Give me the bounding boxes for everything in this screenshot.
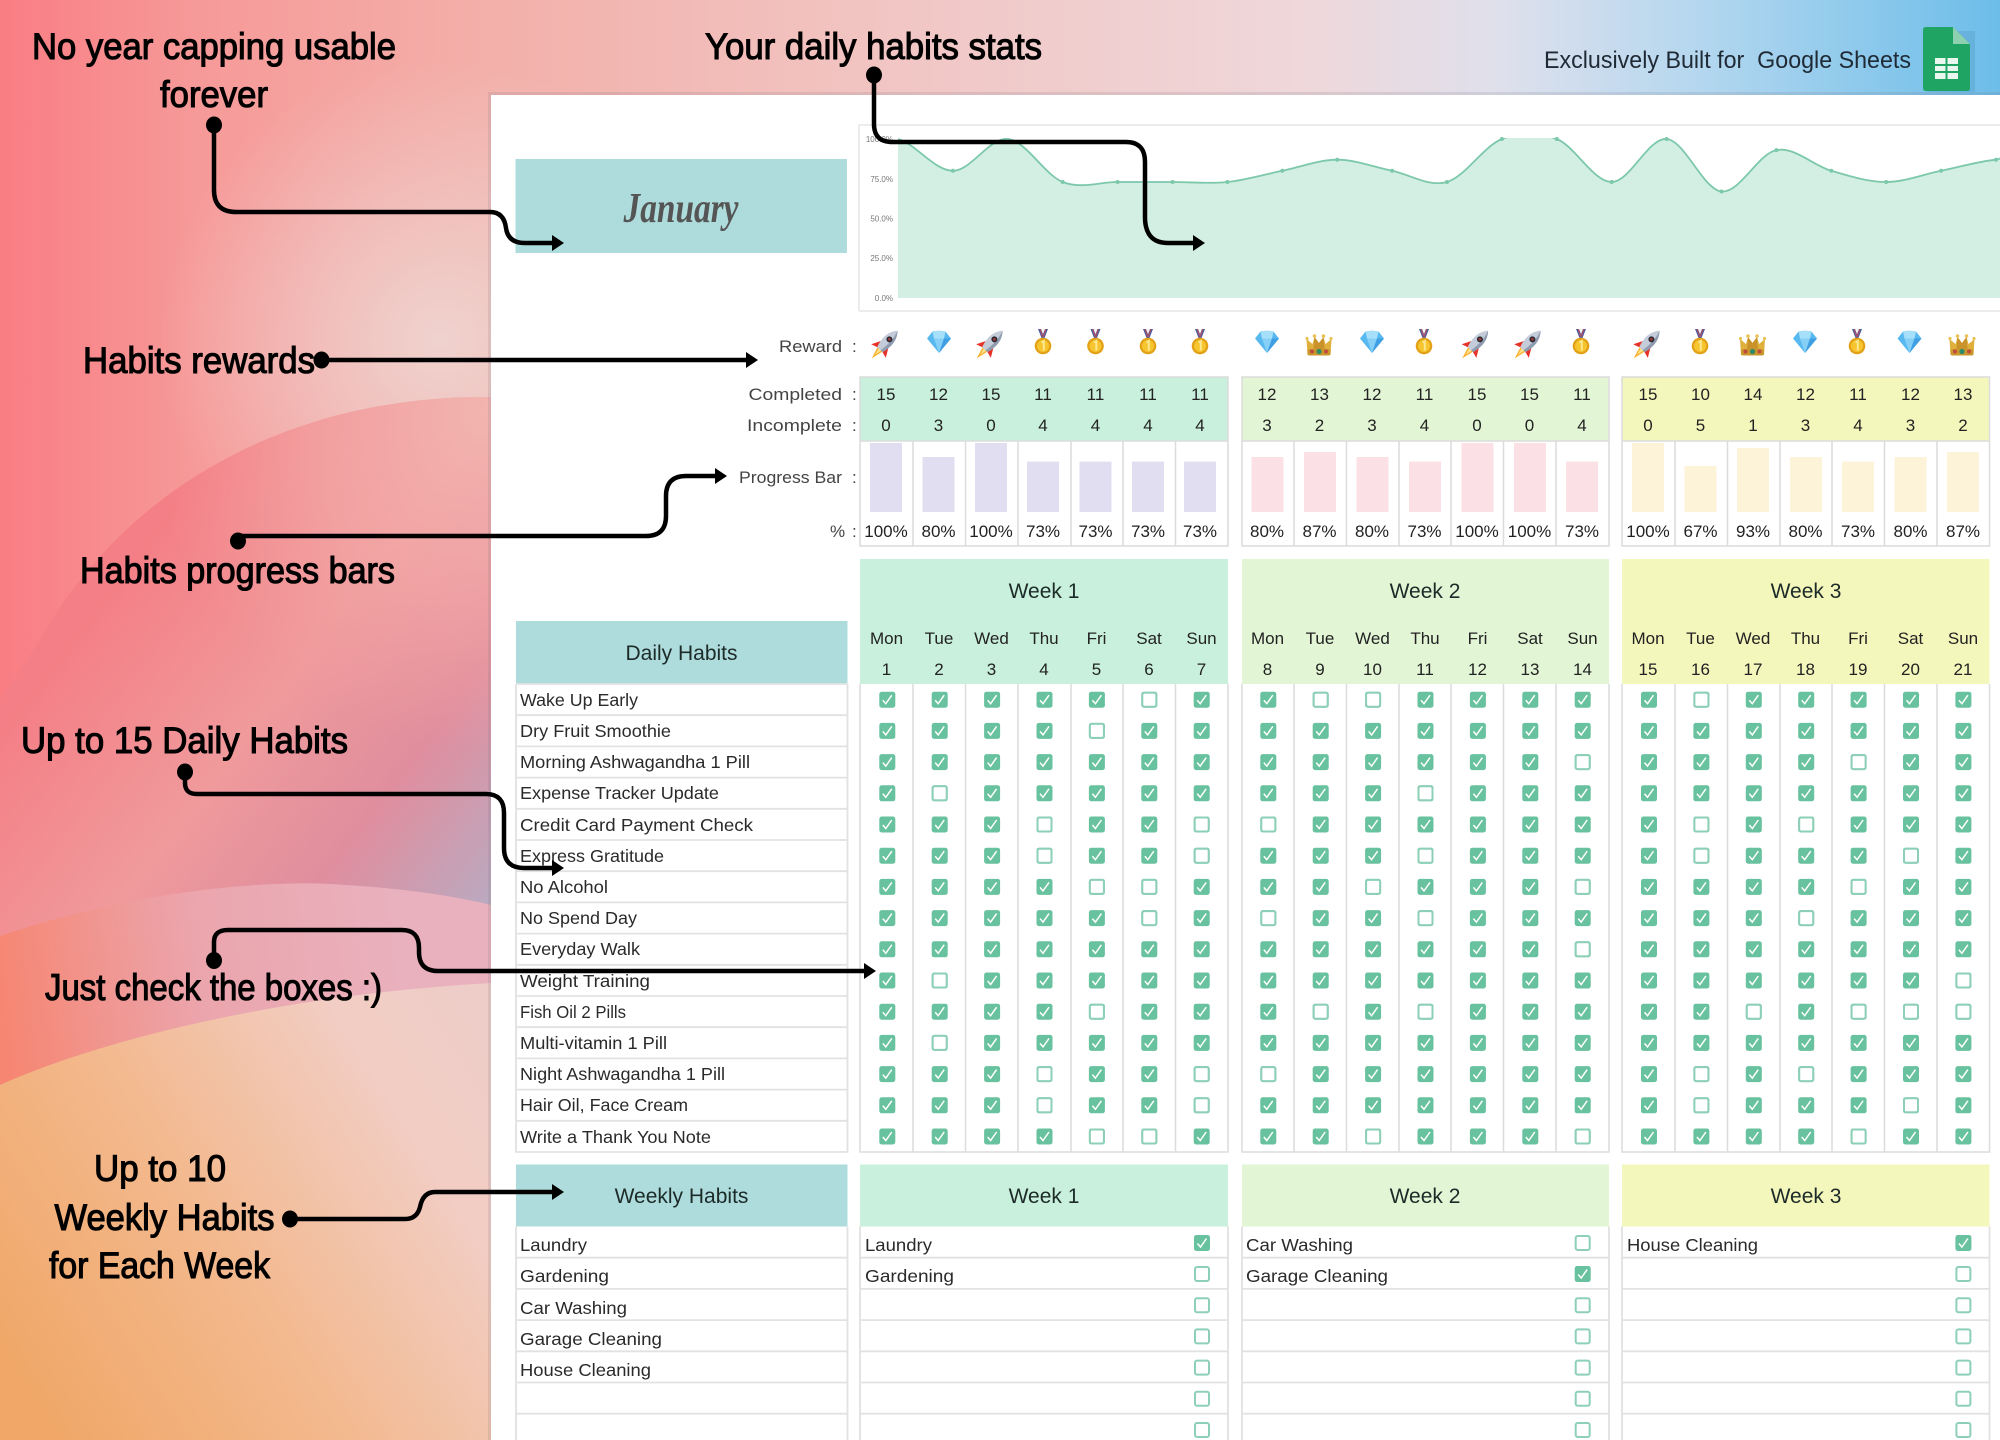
weekly habit names: Car Washing [520,1298,627,1318]
numbers week 1: 4 [1195,416,1205,435]
numbers week 2: 80% [1250,522,1284,541]
numbers week 2: 0 [1472,416,1482,435]
chart data points [951,137,1998,194]
stats: week 3 [1622,377,1990,546]
numbers week 1: 15 [982,385,1000,404]
chart y axis labels: 50.0% [870,214,893,224]
weekly habit names: Laundry [520,1235,587,1255]
habit names: Write a Thank You Note [520,1127,711,1147]
reward icons row [864,324,1976,365]
checkboxes week 1 [879,692,1210,1144]
numbers week 3: 4 [1853,416,1863,435]
days and dates week 2: Fri [1468,629,1487,648]
numbers week 3: 2 [1958,416,1968,435]
callout: up to 10 weekly habits [49,1148,564,1286]
progress bars week 2 [1252,443,1598,512]
numbers week 2: 100% [1508,522,1551,541]
days and dates week 3 [1631,629,1978,679]
arrow: to progress bars [230,468,727,550]
days and dates week 3: Thu [1791,629,1820,648]
numbers week 2: 2 [1315,416,1324,435]
days and dates week 1: 4 [1039,660,1049,679]
weekly checklist: week 1: Gardening [865,1266,954,1286]
daily habits header: Daily Habits [625,642,738,665]
numbers week 2: 80% [1355,522,1389,541]
weekly checkboxes week 2 [1575,1236,1591,1437]
days and dates week 1: Sat [1136,629,1162,648]
habit names: Wake Up Early [520,690,638,710]
habit names: Everyday Walk [520,939,640,959]
days and dates week 2: Mon [1251,629,1284,648]
habit names: Credit Card Payment Check [520,815,753,835]
weekly checklist: week 3: Week 3 [1771,1185,1841,1208]
chart y axis labels: 25.0% [870,254,893,263]
weekly habit names: House Cleaning [520,1360,651,1380]
weekly checklist: week 3 [1622,1164,1990,1440]
days and dates week 1: 6 [1144,660,1154,679]
numbers week 1: 11 [1139,385,1157,404]
numbers week 2: 11 [1573,385,1591,404]
icon: Google Sheets [1923,27,1975,92]
callout: your daily habits stats [705,26,1205,251]
days and dates week 3: 20 [1901,660,1920,679]
numbers week 3: 67% [1683,522,1718,541]
numbers week 3 [1626,385,1980,541]
days and dates week 1: Sun [1186,629,1217,648]
chart area and line [898,134,2000,298]
numbers week 3: 12 [1901,385,1920,404]
numbers week 2: 73% [1565,522,1599,541]
numbers week 3: 73% [1841,522,1875,541]
days and dates week 2: 14 [1573,660,1592,679]
numbers week 1 [864,385,1217,541]
weekly habits list [516,1164,848,1440]
checkboxes week 2 [1260,692,1591,1144]
habit names: No Spend Day [520,908,637,928]
numbers week 3: 12 [1796,385,1815,404]
numbers week 3: 0 [1643,416,1653,435]
checklist: week 2 [1242,559,1609,1152]
habit names [520,690,753,1147]
row labels: : [852,385,857,404]
arrow: to habit list [177,764,564,876]
days and dates week 1: Mon [870,629,903,648]
checkboxes week 3 [1641,692,1971,1144]
chart y axis labels: 75.0% [870,175,893,184]
chart y axis labels: 100.0% [866,135,893,144]
numbers week 1: 12 [929,385,948,404]
numbers week 1: 100% [864,522,908,541]
callout: no year capping [32,26,564,251]
stats: week 2 [1242,377,1609,546]
weekly checklist: week 1: Week 1 [1009,1185,1079,1208]
days and dates week 3: 17 [1744,660,1762,679]
numbers week 1: 73% [1131,522,1165,541]
habit names: Multi-vitamin 1 Pill [520,1033,667,1053]
days and dates week 3: Sat [1898,629,1924,648]
numbers week 1: 0 [881,416,891,435]
callout: up to 10 weekly habits: for Each Week [49,1245,270,1286]
checklist: week 2: Week 2 [1390,580,1460,603]
checklist: week 3 [1622,559,1990,1152]
days and dates week 3: 21 [1954,660,1972,679]
weekly checkboxes week 3 [1955,1235,1971,1437]
arrow: to chart [866,66,1205,251]
numbers week 3: 1 [1748,416,1758,435]
weekly checklist: week 1: Laundry [865,1235,932,1255]
weekly checkboxes week 1 [1194,1235,1210,1437]
checklist: week 3: Week 3 [1771,580,1841,603]
numbers week 1: 11 [1191,385,1209,404]
days and dates week 3: Wed [1736,629,1770,648]
days and dates week 3: Sun [1948,629,1978,648]
numbers week 2: 3 [1262,416,1272,435]
callout: just check the boxes: Just check the boxes :) [45,967,382,1008]
numbers week 2: 11 [1416,385,1433,404]
numbers week 2: 12 [1258,385,1276,404]
callout: up to 15 daily habits [21,720,564,876]
daily habits list [516,621,848,1152]
days and dates week 2: 8 [1263,660,1272,679]
habit names: Expense Tracker Update [520,783,719,803]
habit names: Dry Fruit Smoothie [520,721,671,741]
row labels: : [852,468,857,487]
numbers week 2: 4 [1420,416,1429,435]
numbers week 2: 15 [1520,385,1539,404]
row labels: Incomplete [747,416,842,435]
weekly checklist: week 2 [1242,1164,1609,1440]
month banner [516,159,847,253]
callout: up to 10 weekly habits: Weekly Habits [54,1197,274,1238]
row labels: Completed [748,385,842,404]
days and dates week 3: Tue [1686,629,1715,648]
row labels: Progress Bar [739,468,842,487]
progress bars week 3 [1632,443,1979,512]
days and dates week 1: Thu [1029,629,1059,648]
numbers week 1: 4 [1038,416,1048,435]
days and dates week 2: Sat [1517,629,1543,648]
numbers week 1: 0 [986,416,996,435]
habit names: Express Gratitude [520,846,664,866]
callout: up to 10 weekly habits: Up to 10 [94,1148,226,1189]
stats: week 1 [860,377,1228,546]
numbers week 3: 87% [1946,522,1980,541]
numbers week 1: 11 [1034,385,1052,404]
days and dates week 1: 3 [987,660,996,679]
chart: daily habit completion area chart [859,125,2000,311]
days and dates week 2: Thu [1410,629,1440,648]
callout: habits progress bars: Habits progress bars [80,550,395,591]
days and dates week 1: 1 [882,660,891,679]
callout: habits rewards [83,340,758,381]
days and dates week 1: Tue [925,629,953,648]
days and dates week 1 [870,629,1217,679]
weekly checklist: week 2: Week 2 [1390,1185,1460,1208]
habit names: Fish Oil 2 Pills [520,1002,626,1022]
weekly checklist: week 1 [860,1164,1228,1440]
arrow: to rewards row [314,352,758,368]
days and dates week 2: 9 [1315,660,1325,679]
row labels: Reward [779,337,842,356]
arrow: to checkboxes [206,930,876,979]
month banner: January [623,186,739,232]
numbers week 1: 80% [921,522,956,541]
numbers week 1: 4 [1091,416,1100,435]
callout: habits rewards: Habits rewards [83,340,315,381]
numbers week 3: 80% [1788,522,1823,541]
numbers week 2 [1250,385,1599,541]
row labels: : [852,416,857,435]
numbers week 1: 15 [877,385,895,404]
callout: up to 15 daily habits: Up to 15 Daily Habits [21,720,348,761]
numbers week 3: 3 [1906,416,1915,435]
arrow: to month banner [206,116,564,251]
panel: spreadsheet [488,92,2000,1440]
chart y axis labels [866,135,893,303]
callout: habits progress bars [80,468,727,591]
numbers week 3: 13 [1954,385,1972,404]
days and dates week 3: 18 [1796,660,1815,679]
days and dates week 1: Fri [1087,629,1106,648]
days and dates week 2: Wed [1355,629,1390,648]
numbers week 2: 15 [1468,385,1486,404]
numbers week 3: 5 [1696,416,1705,435]
weekly habit names: Gardening [520,1266,609,1286]
arrow: to weekly habits [282,1184,564,1228]
numbers week 3: 11 [1849,385,1867,404]
numbers week 2: 100% [1455,522,1499,541]
row labels: : [852,337,857,356]
callout: just check the boxes [45,930,876,1008]
numbers week 2: 13 [1310,385,1329,404]
habit names: No Alcohol [520,877,608,897]
days and dates week 2: 13 [1521,660,1539,679]
row labels: : [852,522,857,541]
numbers week 3: 3 [1801,416,1810,435]
days and dates week 2: 11 [1416,660,1434,679]
numbers week 2: 73% [1407,522,1442,541]
text: exclusively built for Google Sheets: Exclusively Built for Google Sheets [1544,47,1911,74]
numbers week 2: 87% [1302,522,1337,541]
numbers week 3: 80% [1893,522,1928,541]
numbers week 3: 100% [1626,522,1670,541]
numbers week 1: 100% [969,522,1013,541]
numbers week 2: 0 [1525,416,1534,435]
checklist: week 1 [860,559,1228,1152]
days and dates week 3: Mon [1631,629,1665,648]
habit names: Morning Ashwagandha 1 Pill [520,752,750,772]
days and dates week 3: 19 [1849,660,1867,679]
chart y axis labels: 0.0% [875,294,893,303]
habit names: Weight Training [520,971,650,991]
numbers week 2: 12 [1363,385,1381,404]
row labels [739,337,857,541]
days and dates week 3: 16 [1691,660,1710,679]
days and dates week 2: Sun [1567,629,1598,648]
callout: no year capping: forever [160,74,268,115]
days and dates week 2: Tue [1306,629,1334,648]
habit names: Hair Oil, Face Cream [520,1095,688,1115]
weekly habits list: Weekly Habits [615,1185,748,1208]
days and dates week 2: 12 [1468,660,1487,679]
days and dates week 1: 2 [934,660,944,679]
numbers week 2: 4 [1577,416,1587,435]
weekly habit names [520,1235,662,1380]
numbers week 3: 14 [1744,385,1762,404]
days and dates week 1: Wed [974,629,1009,648]
days and dates week 1: 7 [1197,660,1206,679]
numbers week 3: 93% [1736,522,1770,541]
header: Google Sheets badge [1544,27,1975,92]
days and dates week 2 [1251,629,1598,679]
numbers week 3: 15 [1639,385,1657,404]
weekly checklist: week 3: House Cleaning [1627,1235,1758,1255]
habit names: Night Ashwagandha 1 Pill [520,1064,725,1084]
callout: your daily habits stats: Your daily habits stats [705,26,1042,67]
callout: no year capping: No year capping usable [32,26,396,67]
days and dates week 2: 10 [1363,660,1382,679]
weekly checklist: week 2: Car Washing [1246,1235,1353,1255]
progress bars week 1 [870,443,1216,512]
numbers week 3: 10 [1691,385,1710,404]
daily habits header [516,621,848,684]
numbers week 1: 73% [1183,522,1217,541]
row labels: % [830,522,845,541]
weekly habit names: Garage Cleaning [520,1329,662,1349]
numbers week 1: 73% [1026,522,1060,541]
numbers week 1: 4 [1143,416,1153,435]
checklist: week 1: Week 1 [1009,580,1079,603]
days and dates week 1: 5 [1092,660,1101,679]
days and dates week 3: 15 [1639,660,1657,679]
numbers week 2: 3 [1367,416,1377,435]
numbers week 1: 3 [934,416,943,435]
days and dates week 3: Fri [1848,629,1868,648]
weekly checklist: week 2: Garage Cleaning [1246,1266,1388,1286]
numbers week 1: 11 [1087,385,1104,404]
numbers week 1: 73% [1078,522,1113,541]
